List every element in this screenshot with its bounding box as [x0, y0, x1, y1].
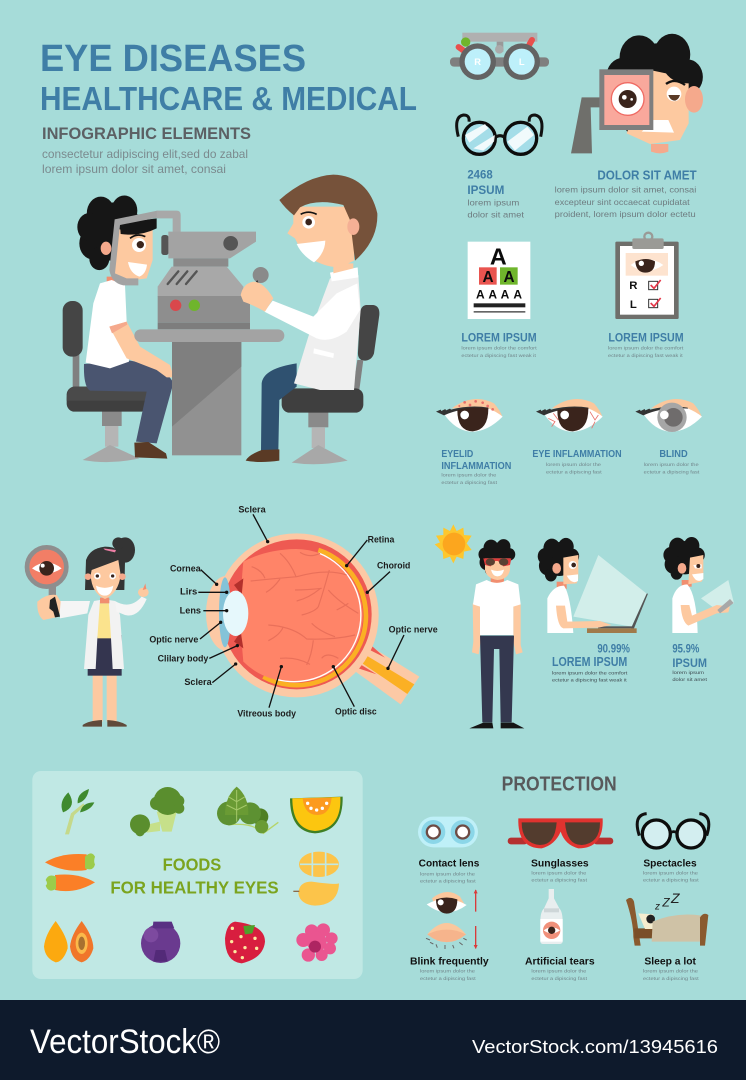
anatomy labels and leaders: Lens — [180, 605, 201, 615]
slit lamp machine — [134, 211, 284, 455]
small captions: ectetur a dipiscing fast — [531, 976, 588, 982]
small captions: lorem ipsum dolor the — [643, 871, 698, 877]
labels: Blink frequently — [410, 956, 489, 967]
heading: foods: FOODS — [163, 855, 221, 875]
caption: lorem ipsum right: lorem ipsum dolor the comfort — [608, 346, 684, 352]
anatomy labels and leaders: Clilary body — [158, 654, 208, 664]
caption: eye inflammation: lorem ipsum dolor the — [546, 462, 601, 468]
caption: lorem ipsum left: lorem ipsum dolor the comfort — [461, 346, 537, 352]
stat: 2468 ipsum: 2468 — [467, 168, 493, 181]
patient — [77, 195, 174, 459]
anatomy labels and leaders: Optic nerve — [149, 634, 198, 644]
figure with phone — [663, 537, 734, 633]
right top panel — [450, 33, 703, 219]
stat: 2468 ipsum: IPSUM — [467, 183, 504, 197]
icon: clipboard: R — [629, 280, 637, 292]
icon: head with eye examination — [571, 34, 703, 153]
small captions: ectetur a dipiscing fast — [420, 878, 476, 884]
icon: spectacles — [637, 814, 709, 848]
anatomy labels and leaders: Choroid — [377, 561, 410, 571]
caption: eyelid inflammation — [441, 449, 511, 486]
diagram: eye anatomy — [206, 533, 419, 704]
text block: dolor sit amet: DOLOR SIT AMET — [597, 168, 697, 182]
icon: trial lens frame — [450, 33, 549, 77]
title: EYE DISEASES — [40, 38, 306, 80]
text block: dolor sit amet — [555, 168, 697, 219]
stat: 2468 ipsum: dolor sit amet — [467, 209, 525, 219]
anatomy labels and leaders: Lirs — [180, 587, 197, 597]
icon: eyelid inflammation eye — [436, 399, 503, 432]
icon: sunglasses — [508, 818, 613, 848]
subtitle: HEALTHCARE & MEDICAL — [40, 80, 417, 117]
figure with sunglasses — [469, 539, 524, 728]
anatomy labels and leaders — [149, 505, 438, 719]
stat: 2468 ipsum: lorem ipsum — [467, 197, 519, 207]
icon: eye chart — [468, 242, 530, 319]
caption: eyelid inflammation: EYELID — [441, 449, 473, 460]
labels: Spectacles — [643, 858, 697, 869]
footer logo: VectorStock® — [30, 1023, 220, 1061]
icon: trial lens frame: L — [519, 57, 525, 67]
intro text: lorem ipsum dolor sit amet, consai — [42, 162, 226, 176]
illustration: eye examination scene — [63, 175, 379, 464]
icon: raspberry — [296, 923, 338, 962]
icon: blind eye — [635, 399, 702, 432]
doctor — [241, 175, 377, 462]
icon: blueberry — [141, 922, 180, 963]
icon: bed: Z — [661, 895, 670, 909]
icon: eye drops bottle — [540, 889, 563, 944]
anatomy labels and leaders: Vitreous body — [237, 709, 296, 719]
heading: foods: FOR HEALTHY EYES — [110, 877, 279, 897]
stat: 95.9%: 95.9% — [672, 641, 700, 655]
icon: strawberry — [225, 922, 265, 963]
stat: 90.99%: lorem ipsum dolor the comfort — [552, 671, 628, 677]
stat: 90.99% — [552, 641, 630, 684]
icon: sun — [435, 524, 472, 563]
icon: eye inflammation eye — [536, 399, 603, 432]
stat: 95.9% — [672, 641, 708, 683]
heading: foods — [110, 855, 279, 897]
caption: eyelid inflammation: INFLAMMATION — [441, 461, 511, 472]
icon: eye chart: A — [490, 243, 507, 269]
caption: blind: lorem ipsum dolor the — [644, 462, 699, 468]
icon: bed: Z — [670, 890, 680, 906]
caption: blind: ectetur a dipiscing fast — [644, 469, 700, 475]
panel: woman and eye anatomy — [27, 505, 438, 727]
icon: contact lens — [418, 817, 478, 847]
caption: eyelid inflammation: lorem ipsum dolor the — [441, 473, 497, 479]
patient chair — [63, 301, 148, 462]
icon: leafy greens — [217, 787, 278, 833]
stat: 90.99%: LOREM IPSUM — [552, 655, 627, 669]
anatomy labels and leaders: Retina — [368, 535, 395, 545]
stat: 95.9%: lorem ipsum — [672, 670, 704, 676]
caption: lorem ipsum right: LOREM IPSUM — [608, 330, 684, 344]
text block: dolor sit amet: lorem ipsum dolor sit amet, consai — [555, 184, 696, 194]
panel: protection — [410, 773, 709, 982]
icon: clipboard — [615, 233, 679, 319]
panel: habits figures — [435, 524, 734, 728]
small captions — [420, 871, 699, 982]
caption: blind — [644, 449, 700, 475]
title block — [40, 38, 417, 176]
doctor chair — [282, 305, 379, 464]
text block: dolor sit amet: excepteur sint occaecat cupidatat — [555, 197, 690, 207]
anatomy labels and leaders: Optic disc — [335, 706, 377, 716]
icon: bed — [626, 890, 708, 946]
labels — [410, 858, 697, 967]
labels: Sunglasses — [531, 858, 589, 869]
footer bar — [0, 1000, 746, 1080]
icon: eye chart: A — [513, 288, 522, 302]
icon: clipboard: L — [630, 299, 637, 311]
small captions: lorem ipsum dolor the — [420, 969, 475, 975]
small captions: lorem ipsum dolor the — [420, 871, 475, 877]
stat: 90.99%: ectetur a dipiscing fast weak it — [552, 678, 627, 684]
panel background — [32, 771, 363, 979]
intro text: consectetur adipiscing elit,sed do zabal — [42, 147, 248, 161]
small captions: ectetur a dipiscing fast — [531, 878, 588, 884]
icon: eye chart: A — [501, 288, 510, 302]
woman doctor with magnifier — [27, 537, 149, 727]
icon: eye chart: A — [488, 288, 497, 302]
anatomy labels and leaders: Cornea — [170, 563, 202, 573]
icon: eye chart: A — [482, 269, 494, 286]
icon: blinking eyes with arrows — [426, 889, 478, 949]
panel: foods for healthy eyes — [32, 771, 363, 979]
labels: Sleep a lot — [644, 956, 697, 967]
icon: mango — [293, 851, 339, 906]
icon: eye chart: A — [476, 288, 485, 302]
caption: eye inflammation — [532, 449, 622, 475]
section heading: INFOGRAPHIC ELEMENTS — [42, 124, 251, 143]
labels: Contact lens — [419, 858, 480, 869]
caption: lorem ipsum left: LOREM IPSUM — [461, 330, 537, 344]
stat: 95.9%: IPSUM — [672, 656, 707, 670]
small captions: lorem ipsum dolor the — [643, 969, 698, 975]
text block: dolor sit amet: proident, lorem ipsum dolor ectetu — [555, 209, 696, 219]
labels: Artificial tears — [525, 956, 595, 967]
icon: pumpkin — [290, 797, 343, 833]
caption: eye inflammation: EYE INFLAMMATION — [532, 449, 622, 460]
icon: carrots — [45, 853, 95, 891]
footer url: VectorStock.com/13945616 — [472, 1036, 718, 1057]
caption: blind: BLIND — [659, 449, 688, 460]
stat: 90.99%: 90.99% — [597, 641, 630, 655]
anatomy labels and leaders: Sclera — [184, 677, 213, 687]
caption: lorem ipsum right — [608, 330, 684, 359]
small captions: ectetur a dipiscing fast — [420, 976, 476, 982]
small captions: ectetur a dipiscing fast — [643, 976, 699, 982]
caption: lorem ipsum left: ectetur a dipiscing fast weak it — [461, 353, 537, 359]
heading: protection: PROTECTION — [502, 773, 617, 796]
figure with laptop — [538, 538, 648, 633]
caption: eye inflammation: ectetur a dipiscing fast — [546, 469, 602, 475]
anatomy labels and leaders: Sclera — [238, 505, 267, 515]
icon: spinach — [62, 789, 94, 834]
caption: lorem ipsum left — [461, 330, 537, 359]
intro text — [42, 147, 248, 176]
caption: eyelid inflammation: ectetur a dipiscing fast — [441, 480, 498, 486]
icon: trial lens frame: R — [474, 57, 481, 67]
small captions: ectetur a dipiscing fast — [643, 878, 699, 884]
icon: glasses — [457, 115, 542, 154]
small captions: lorem ipsum dolor the — [531, 969, 587, 975]
icon: papaya — [44, 921, 93, 962]
right middle panel — [436, 233, 702, 486]
icon: eye chart: A — [503, 269, 515, 286]
anatomy labels and leaders: Optic nerve — [389, 625, 438, 635]
caption: lorem ipsum right: ectetur a dipiscing fast weak it — [608, 353, 683, 359]
stat: 95.9%: dolor sit amet — [672, 677, 708, 683]
small captions: lorem ipsum dolor the — [531, 871, 587, 877]
icon: broccoli — [130, 787, 184, 836]
icon: bed: z — [654, 901, 660, 912]
stat: 2468 ipsum — [467, 168, 525, 219]
